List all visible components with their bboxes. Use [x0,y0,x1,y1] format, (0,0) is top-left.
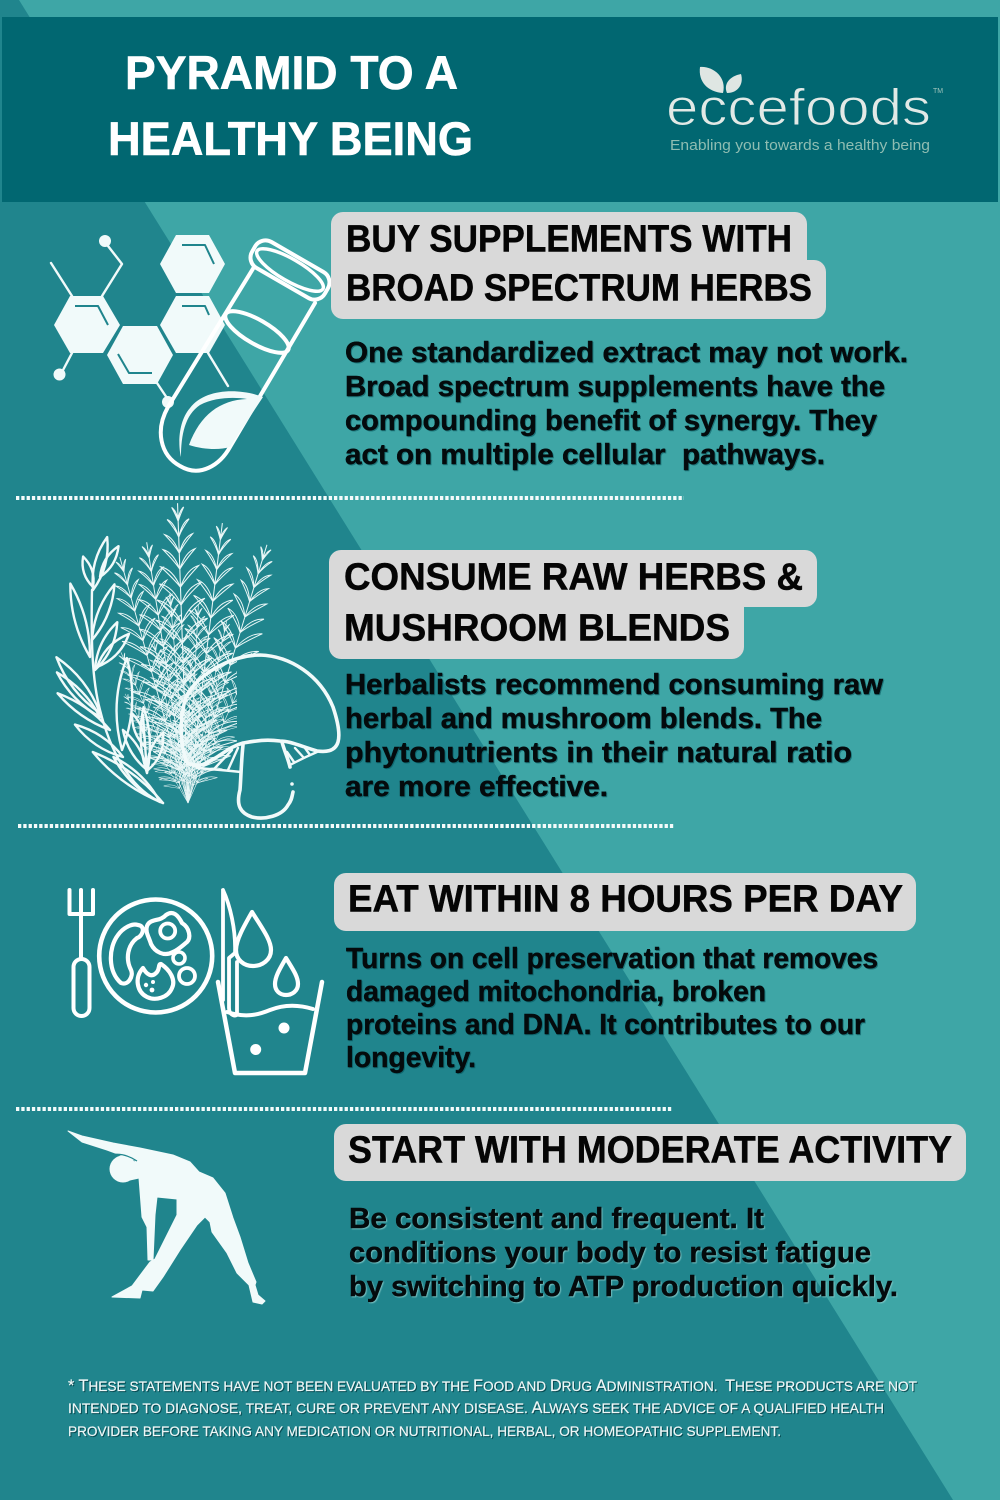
icon: stretching figure [68,1131,265,1304]
body text: longevity. [346,1042,476,1074]
heading: EAT WITHIN 8 HOURS PER DAY [348,878,903,920]
heading: BUY SUPPLEMENTS WITH [346,218,792,260]
disclaimer footnote: INTENDED TO DIAGNOSE, TREAT, CURE OR PREVENT ANY DISEASE. ALWAYS SEEK THE ADVICE OF A QUALIFIED HEALTH [68,1399,884,1417]
disclaimer footnote: * THESE STATEMENTS HAVE NOT BEEN EVALUATED BY THE FOOD AND DRUG ADMINISTRATION. THESE PRODUCTS ARE NOT [68,1377,917,1395]
body text: by switching to ATP production quickly. [349,1271,898,1303]
body text [345,669,883,803]
body text: Herbalists recommend consuming raw [345,669,883,701]
title: HEALTHY BEING [108,112,473,165]
section 4: activity [68,1124,966,1304]
body text: Be consistent and frequent. It [349,1203,764,1235]
header band [2,17,998,202]
body text [346,943,878,1074]
body text: Turns on cell preservation that removes [346,943,878,975]
body text: act on multiple cellular pathways. [345,439,825,471]
body text: herbal and mushroom blends. The [345,703,822,735]
heading: BROAD SPECTRUM HERBS [346,268,812,310]
body text: Broad spectrum supplements have the [345,371,885,403]
body text [349,1203,898,1303]
logo: eccefoods: eccefoods [666,79,931,137]
icon: rosemary and mushroom [52,502,339,818]
heading: MUSHROOM BLENDS [344,608,730,650]
icon: molecule and test tube with leaf [51,235,334,471]
heading [331,212,826,319]
body text: conditions your body to resist fatigue [349,1237,871,1269]
title: PYRAMID TO A [125,46,458,99]
title [108,46,473,165]
section 2: herbs [52,502,883,818]
logo: eccefoods [666,67,943,154]
heading [329,550,817,659]
body text: damaged mitochondria, broken [346,976,766,1008]
icon: plate, cutlery and water glass [70,890,322,1073]
body text: compounding benefit of synergy. They [345,405,877,437]
body text: One standardized extract may not work. [345,337,908,369]
logo: eccefoods: TM [933,88,943,95]
disclaimer footnote: PROVIDER BEFORE TAKING ANY MEDICATION OR NUTRITIONAL, HERBAL, OR HOMEOPATHIC SUPPLEMENT. [68,1423,781,1439]
section 1: supplements [51,212,908,471]
body text: proteins and DNA. It contributes to our [346,1009,865,1041]
disclaimer footnote [68,1377,917,1439]
body text: are more effective. [345,771,608,803]
heading: START WITH MODERATE ACTIVITY [348,1130,952,1172]
logo: eccefoods: Enabling you towards a healthy being [670,138,930,154]
body text: phytonutrients in their natural ratio [345,737,852,769]
section 3: eating window [70,873,916,1074]
heading: CONSUME RAW HERBS & [344,556,803,598]
body text [345,337,908,471]
